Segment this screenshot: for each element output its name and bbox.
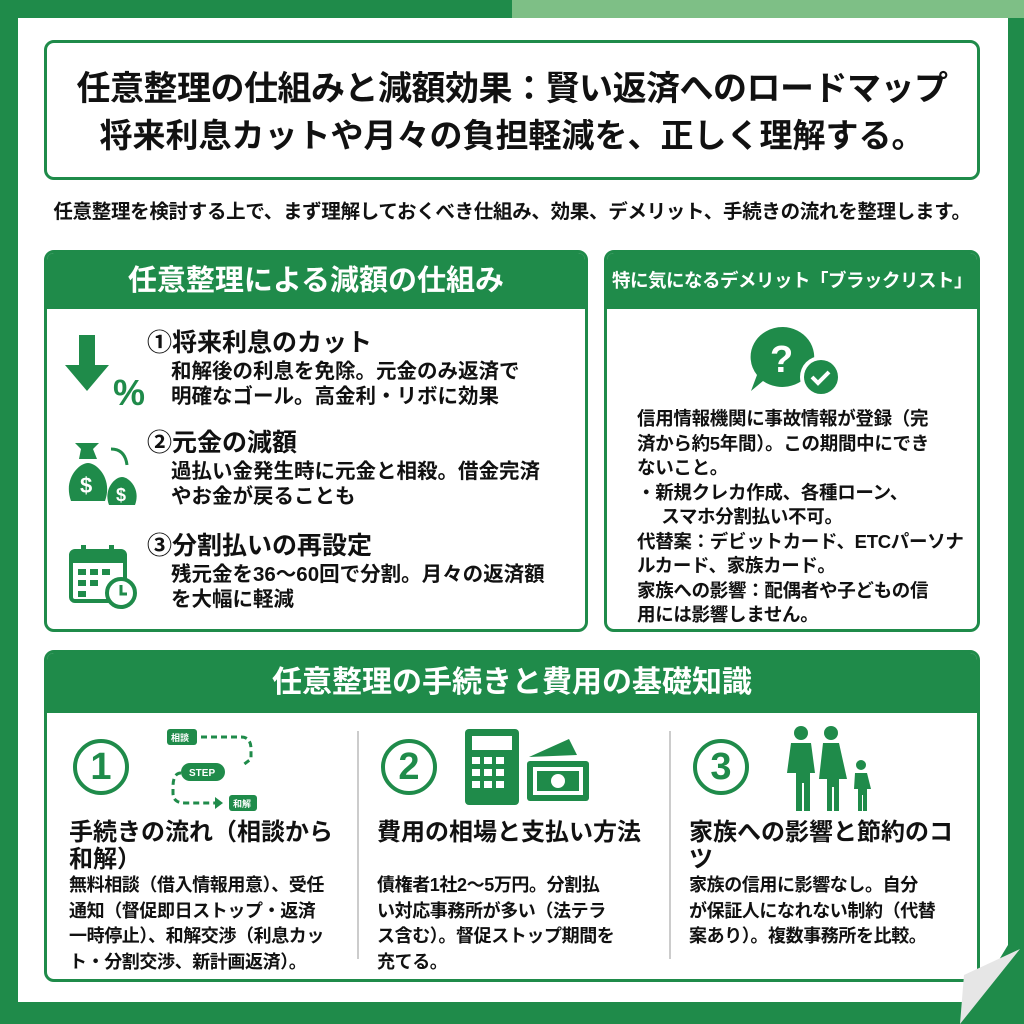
heading 2: 費用の相場と支払い方法 — [377, 819, 641, 846]
icon: family — [787, 726, 871, 811]
text: blacklist details: スマホ分割払い不可。 — [661, 506, 843, 527]
item 2: やお金が戻ることも — [171, 485, 356, 508]
icon: step flow: STEP — [189, 768, 215, 779]
panel: mechanism — [44, 250, 588, 632]
item 3: ③分割払いの再設定 — [147, 532, 372, 560]
heading 1: 和解） — [69, 846, 141, 873]
text: blacklist details: 信用情報機関に事故情報が登録（完 — [637, 408, 928, 429]
icon: down arrow percent: % — [113, 372, 145, 413]
page curl — [960, 945, 1020, 1024]
text 1: 無料相談（借入情報用意）、受任 — [69, 875, 324, 895]
title: 任意整理の仕組みと減額効果：賢い返済へのロードマップ — [76, 70, 948, 108]
heading 1: 手続きの流れ（相談から — [69, 819, 333, 846]
heading 3 — [689, 819, 953, 873]
item 2 — [147, 429, 540, 508]
icon: number 2: 2 — [398, 746, 420, 788]
title box — [44, 40, 980, 180]
icon: step flow: 相談 — [171, 732, 189, 743]
item 3: 残元金を36〜60回で分割。月々の返済額 — [171, 563, 545, 586]
icon: number 1 — [73, 739, 129, 795]
panel: procedures — [44, 650, 980, 982]
text 3: 案あり）。複数事務所を比較。 — [689, 926, 926, 946]
icon: number 1: 1 — [90, 746, 112, 788]
column 3 — [689, 726, 953, 946]
icon: down arrow percent — [65, 335, 145, 413]
text: blacklist details: ・新規クレカ作成、各種ローン、 — [637, 482, 908, 502]
icon: step flow — [167, 729, 257, 811]
heading: procedures: 任意整理の手続きと費用の基礎知識 — [272, 666, 752, 699]
text 3: が保証人になれない制約（代替 — [689, 900, 935, 920]
text: blacklist details: 家族への影響：配偶者や子どもの信 — [637, 580, 928, 600]
heading: blacklist: 特に気になるデメリット「ブラックリスト」 — [612, 270, 972, 291]
text 1 — [69, 875, 324, 972]
icon: question check bubbles: ? — [770, 339, 793, 381]
text: blacklist details: 済から約5年間）。この期間中にでき — [637, 432, 929, 454]
item 3: を大幅に軽減 — [171, 588, 294, 611]
item 1: ①将来利息のカット — [147, 329, 372, 357]
subtitle: 将来利息カットや月々の負担軽減を、正しく理解する。 — [100, 117, 924, 154]
item 2: 過払い金発生時に元金と相殺。借金完済 — [171, 460, 540, 483]
panel: blacklist — [604, 250, 980, 632]
heading: mechanism: 任意整理による減額の仕組み — [128, 265, 504, 297]
heading: blacklist — [607, 253, 977, 309]
background right light block — [512, 0, 1024, 18]
heading 3: ツ — [689, 846, 713, 873]
heading 1 — [69, 819, 333, 873]
text 2: 充てる。 — [377, 952, 447, 972]
intro text: 任意整理を検討する上で、まず理解しておくべき仕組み、効果、デメリット、手続きの流れを整理します。 — [53, 201, 971, 223]
icon: number 3 — [693, 739, 749, 795]
item 3 — [147, 532, 545, 611]
item 2: ②元金の減額 — [147, 429, 297, 457]
heading: mechanism — [47, 253, 585, 309]
column 1 — [69, 729, 333, 972]
icon: question check bubbles — [750, 327, 838, 394]
text 2 — [377, 875, 614, 972]
column 2 — [377, 729, 641, 972]
icon: money bags: $ — [80, 473, 92, 498]
text: blacklist details: ないこと。 — [637, 457, 728, 478]
text: blacklist details: 代替案：デビットカード、ETCパーソナ — [637, 530, 964, 552]
icon: calendar clock — [69, 545, 137, 609]
icon: money bags — [68, 443, 137, 505]
icon: step flow: 和解 — [233, 798, 251, 809]
item 1 — [147, 329, 520, 408]
text 3: 家族の信用に影響なし。自分 — [689, 875, 918, 895]
heading 3: 家族への影響と節約のコ — [689, 819, 953, 846]
text: blacklist details: 用には影響しません。 — [637, 604, 818, 625]
icon: calculator and money — [465, 729, 589, 805]
text 1: 一時停止）、和解交渉（利息カッ — [69, 926, 324, 946]
item 1: 明確なゴール。高金利・リボに効果 — [171, 385, 499, 408]
icon: money bags: $ — [116, 485, 126, 505]
item 1: 和解後の利息を免除。元金のみ返済で — [171, 360, 520, 383]
heading: procedures — [47, 653, 977, 713]
icon: number 3: 3 — [710, 746, 732, 788]
icon: number 2 — [381, 739, 437, 795]
text 3 — [689, 875, 936, 946]
text: blacklist details: ルカード、家族カード。 — [637, 555, 836, 576]
text 1: 通知（督促即日ストップ・返済 — [69, 900, 315, 920]
text 1: ト・分割交渉、新計画返済）。 — [69, 952, 306, 972]
text 2: い対応事務所が多い（法テラ — [377, 900, 606, 920]
text 2: 債権者1社2〜5万円。分割払 — [377, 875, 599, 895]
text: blacklist details — [637, 408, 964, 625]
text 2: ス含む）。督促ストップ期間を — [377, 926, 614, 946]
